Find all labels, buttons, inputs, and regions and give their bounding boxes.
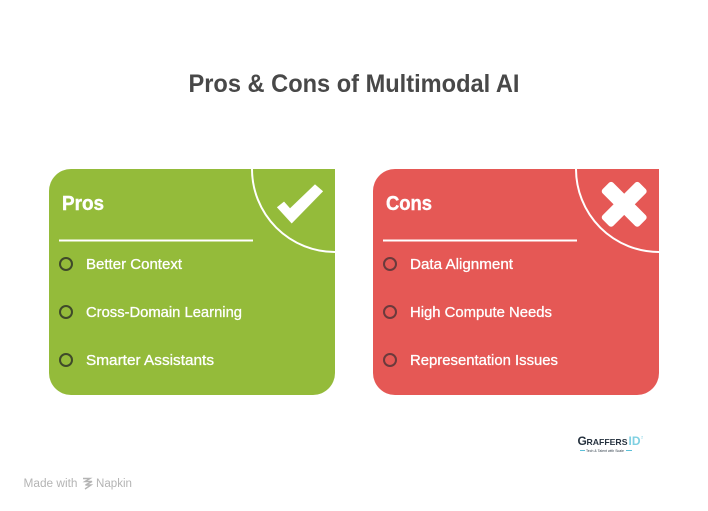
cons card background <box>373 169 659 395</box>
logo: GraffersID: Tech & Talent with Scale <box>586 448 625 453</box>
cons heading: Cons <box>386 193 432 215</box>
footer: Made with Napkin <box>24 478 132 490</box>
logo: GraffersID: 2 <box>641 434 644 440</box>
footer: Made with Napkin: Made with <box>24 478 78 490</box>
logo: GraffersID: RAFFERS <box>586 437 628 447</box>
cons corner arc <box>576 169 659 252</box>
pros heading: Pros <box>62 193 104 215</box>
logo: GraffersID: G <box>578 434 587 448</box>
icon: Napkin logo <box>83 478 92 489</box>
pros card background <box>49 169 335 395</box>
pros item: Better Context: Better Context <box>86 257 182 273</box>
title: Pros & Cons of Multimodal AI <box>188 70 520 98</box>
logo: GraffersID <box>578 434 644 453</box>
cons item: Data Alignment: Data Alignment <box>410 257 513 273</box>
footer: Made with Napkin: Napkin <box>96 478 132 490</box>
panel: cons <box>373 169 659 395</box>
logo: GraffersID: ID <box>628 436 640 448</box>
pros corner arc <box>252 169 335 252</box>
icon: cross mark <box>601 181 648 228</box>
pros divider <box>59 240 253 242</box>
cons item: High Compute Needs: High Compute Needs <box>410 305 552 321</box>
cons item: Representation Issues: Representation Issues <box>410 353 558 369</box>
icon: check mark <box>277 185 323 223</box>
cons divider <box>383 240 577 242</box>
pros item: Cross-Domain Learning: Cross-Domain Learning <box>86 305 242 321</box>
pros item: Smarter Assistants: Smarter Assistants <box>86 353 214 369</box>
panel: pros <box>49 169 335 395</box>
